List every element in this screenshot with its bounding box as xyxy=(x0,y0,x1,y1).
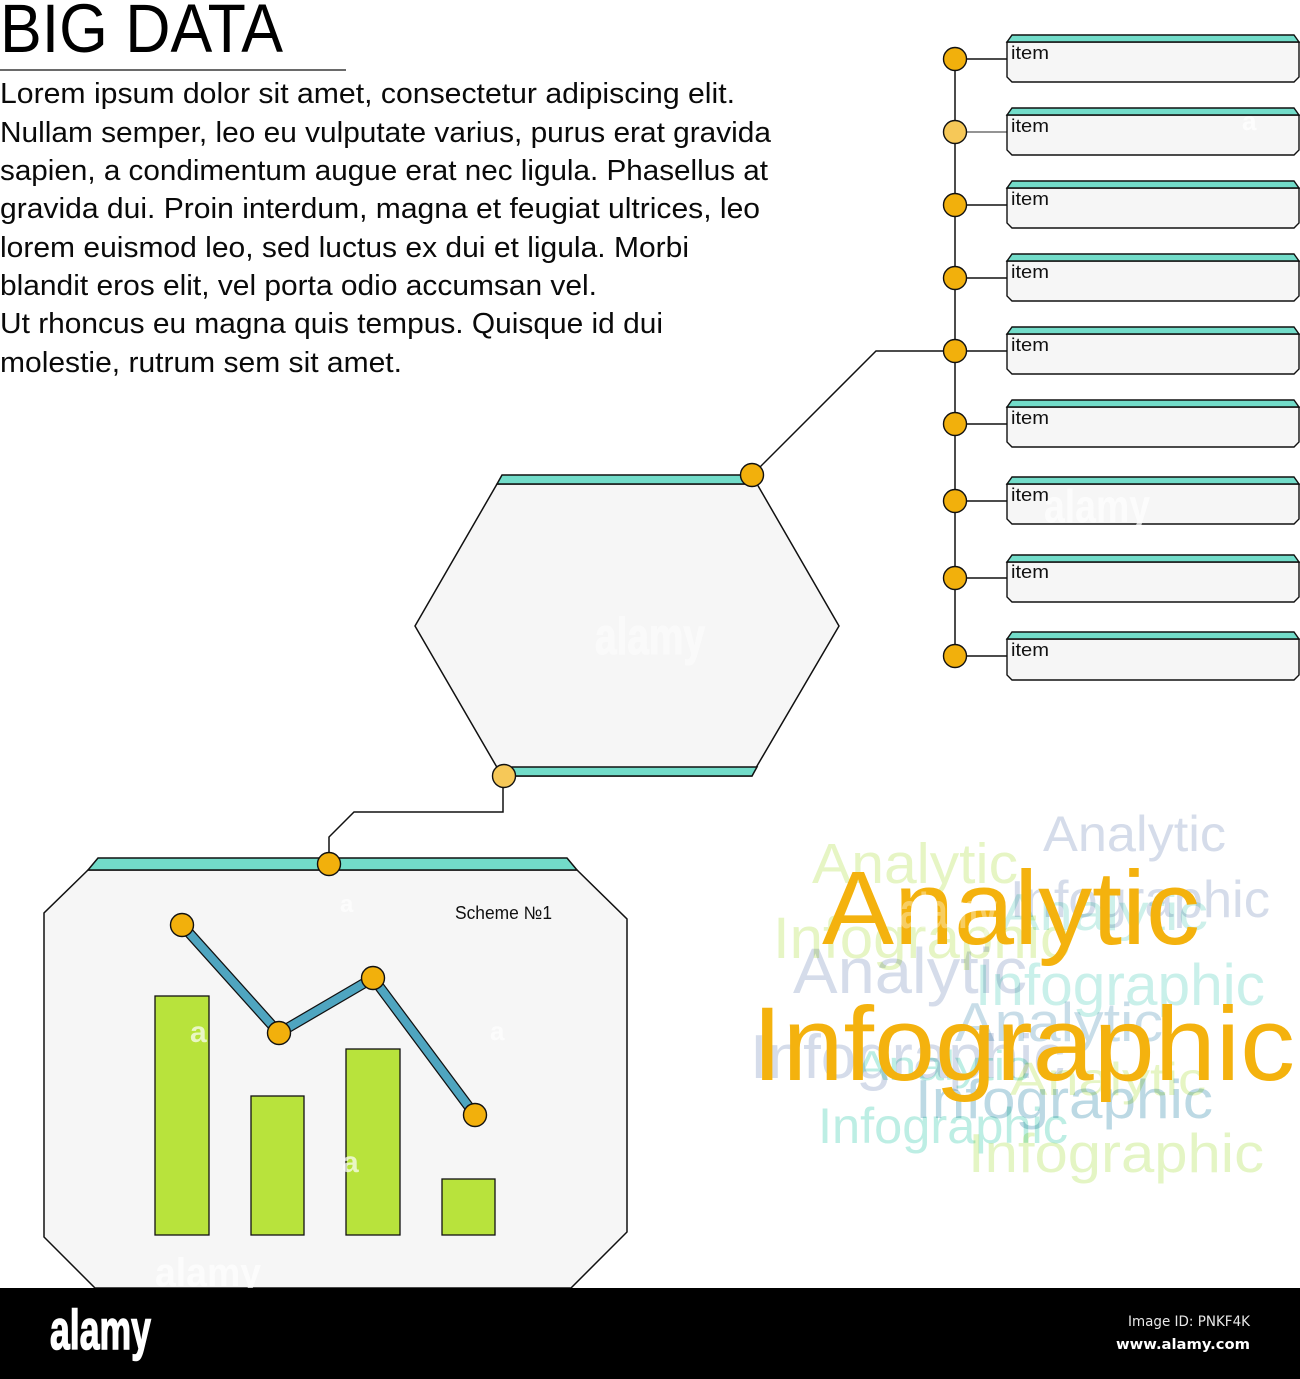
item list xyxy=(944,35,1299,680)
panel watermarks: a xyxy=(490,1016,505,1046)
item 3 xyxy=(944,181,1299,228)
item 2: item xyxy=(1011,115,1049,136)
item 8: item xyxy=(1011,561,1049,582)
watermark: alamy xyxy=(595,608,705,666)
hexagon bottom band xyxy=(497,767,757,776)
body text block: lorem euismod leo, sed luctus ex dui et ligula. Morbi xyxy=(0,232,689,264)
panel: chart xyxy=(44,852,627,1295)
word cloud watermark: alamy xyxy=(900,883,997,939)
pale words xyxy=(750,806,1270,1184)
item 9 xyxy=(944,632,1299,680)
pale words: Infographic xyxy=(773,906,1070,971)
item 2 xyxy=(944,106,1299,155)
panel watermarks xyxy=(155,891,505,1295)
pale words: Analytic xyxy=(1010,1053,1206,1105)
large word: Infographic: Infographic xyxy=(752,986,1295,1103)
item 1 xyxy=(944,35,1299,82)
pale words: Analytic xyxy=(812,832,1018,896)
hexagon bottom node xyxy=(492,764,516,788)
body text block: Lorem ipsum dolor sit amet, consectetur adipiscing elit. xyxy=(0,78,735,110)
panel watermarks: a xyxy=(340,891,354,918)
chart panel node xyxy=(318,852,340,876)
body text block: molestie, rutrum sem sit amet. xyxy=(0,347,402,379)
pale words: Infographic xyxy=(818,1098,1068,1154)
panel watermarks: a xyxy=(342,1146,359,1179)
item 2: a xyxy=(1242,106,1257,136)
bar chart xyxy=(155,996,495,1235)
body text block: Nullam semper, leo eu vulputate varius, purus erat gravida xyxy=(0,117,771,149)
body text block: gravida dui. Proin interdum, magna et feugiat ultrices, leo xyxy=(0,193,760,225)
large word: Analytic: Analytic xyxy=(822,850,1200,967)
item 5: item xyxy=(1011,334,1049,355)
item 4: item xyxy=(1011,261,1049,282)
item list spine xyxy=(954,59,956,656)
word cloud xyxy=(750,806,1295,1184)
footer logo: alamy xyxy=(50,1298,151,1361)
hexagon top band xyxy=(497,475,757,484)
item 3: item xyxy=(1011,188,1049,209)
line chart xyxy=(170,914,486,1126)
pale words: Infographic xyxy=(975,953,1265,1018)
pale words: Analytic xyxy=(1043,806,1226,862)
pale words: Infographic xyxy=(750,1023,1065,1092)
item 1: item xyxy=(1011,42,1049,63)
image id: Image ID: PNKF4K xyxy=(1128,1314,1251,1330)
pale words: Analytic xyxy=(955,991,1163,1053)
connector: hexagon to item list xyxy=(752,351,955,475)
item 5 xyxy=(944,327,1299,374)
panel watermarks: a xyxy=(190,1016,207,1049)
body text block: sapien, a condimentum augue erat nec ligula. Phasellus at xyxy=(0,155,768,187)
chart label: Scheme №1 xyxy=(455,903,552,923)
item 6: item xyxy=(1011,407,1049,428)
pale words: Analytic xyxy=(793,935,1027,1007)
chart panel top band xyxy=(88,858,577,870)
body text block xyxy=(0,78,771,379)
item 9: item xyxy=(1011,639,1049,660)
panel watermarks: alamy xyxy=(155,1251,262,1295)
item 4 xyxy=(944,254,1299,301)
footer bar xyxy=(0,1288,1300,1379)
connector: hexagon to chart panel xyxy=(329,776,503,864)
pale words: Infographic xyxy=(1010,871,1270,929)
item 8 xyxy=(944,555,1299,602)
pale words: Infographic xyxy=(968,1122,1264,1184)
panel: hexagon xyxy=(415,464,839,788)
item 7: item xyxy=(1011,484,1049,505)
pale words: Analytic xyxy=(1000,884,1208,942)
body text block: blandit eros elit, vel porta odio accumsan vel. xyxy=(0,270,597,302)
item 7 xyxy=(944,477,1299,532)
item 7: alamy xyxy=(1044,480,1150,532)
body text block: Ut rhoncus eu magna quis tempus. Quisque id dui xyxy=(0,308,663,340)
website: www.alamy.com xyxy=(1116,1337,1250,1353)
hexagon top node xyxy=(740,464,764,486)
item 6 xyxy=(944,400,1299,447)
pale words: Analytic xyxy=(855,1042,1030,1089)
pale words: Infographic xyxy=(915,1068,1213,1130)
